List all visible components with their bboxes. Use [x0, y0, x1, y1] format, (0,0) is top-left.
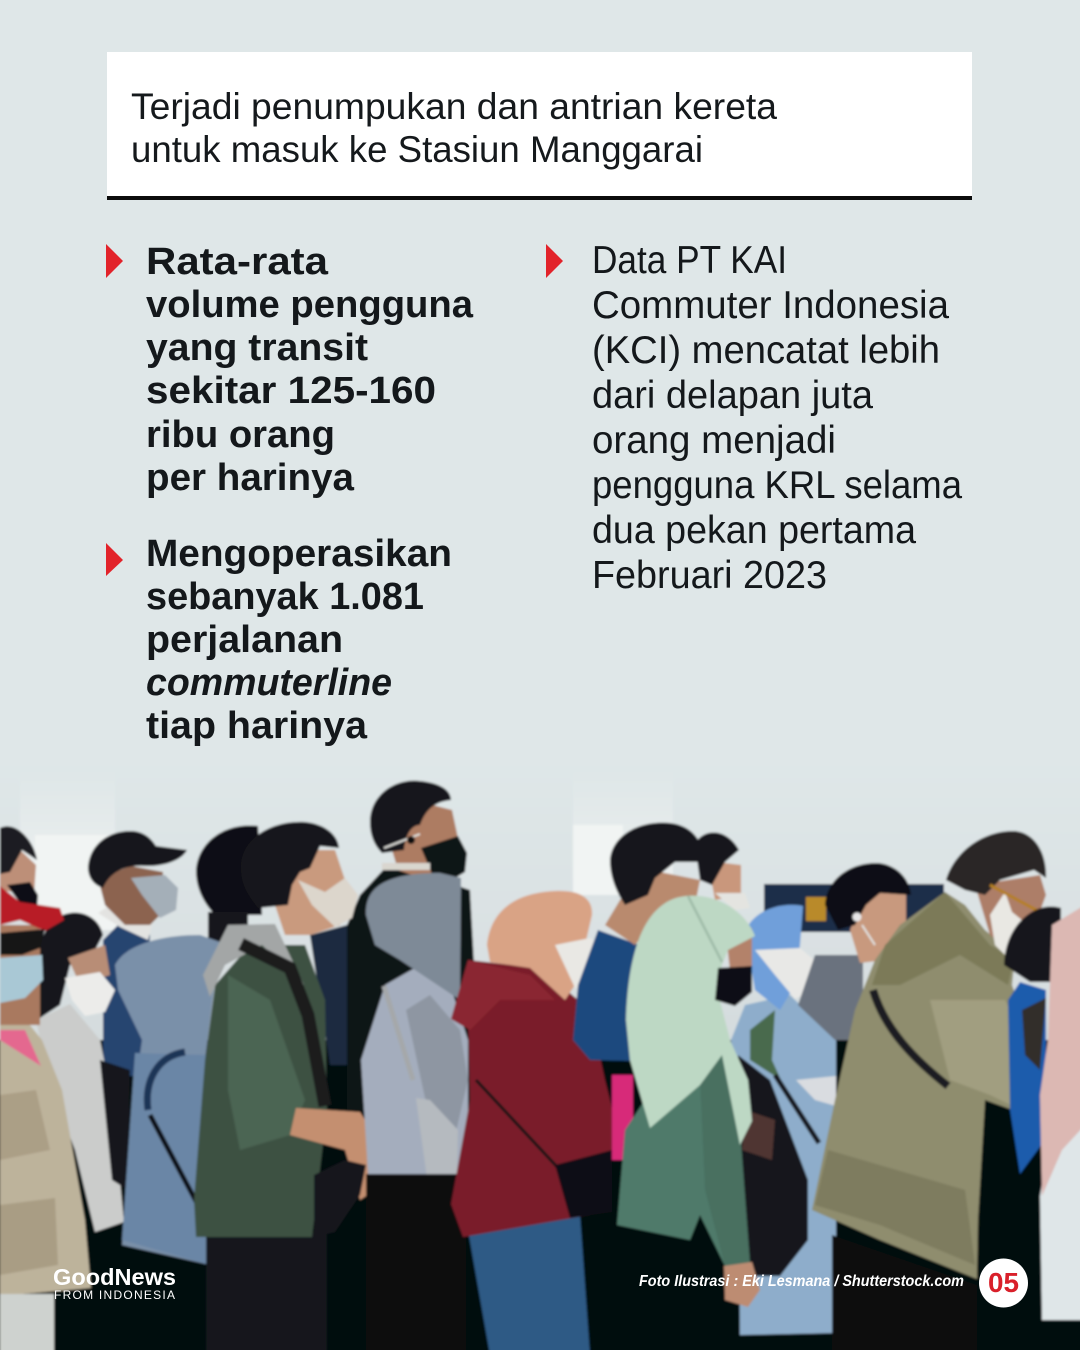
- bullet: average transit users: [106, 241, 474, 499]
- title: [131, 86, 777, 170]
- man with black mask, back row: [347, 781, 476, 1110]
- text block: Februari 2023: [592, 554, 827, 597]
- woman with pink hijab, far right: [1040, 905, 1080, 1320]
- text block: [146, 533, 452, 747]
- icon: red triangle: [546, 244, 563, 278]
- text block: Rata-rata: [146, 241, 329, 283]
- man with red cap and beige vest: [0, 886, 91, 1350]
- person in blue jacket, far right: [1004, 907, 1061, 1174]
- man in olive jacket with white mask: [812, 831, 1046, 1350]
- page number badge: [979, 1258, 1028, 1308]
- text block: dua pekan pertama: [592, 509, 917, 552]
- text block: Data PT KAI: [592, 239, 787, 282]
- man with black cap: [88, 831, 187, 1076]
- text block: [592, 239, 963, 597]
- text block: sekitar 125-160: [146, 370, 436, 412]
- dark lower crowd: [0, 1040, 1080, 1350]
- photo: crowd of commuters queueing: [0, 760, 1080, 1350]
- text block: pengguna KRL selama: [592, 464, 963, 507]
- woman with blue scarf and striped shirt: [731, 905, 836, 1335]
- header panel: [107, 52, 972, 200]
- bullet: KCI data: [546, 239, 963, 597]
- text block: perjalanan: [146, 619, 343, 661]
- text block: Mengoperasikan: [146, 533, 452, 575]
- text block: [146, 241, 474, 499]
- man with white earbud: [798, 863, 911, 1040]
- station wall: [0, 760, 1080, 1120]
- logo: GoodNews from Indonesia: [53, 1264, 176, 1302]
- text block: dari delapan juta: [592, 374, 874, 417]
- title: Terjadi penumpukan dan antrian kereta: [131, 86, 777, 127]
- logo: GoodNews from Indonesia: FROM INDONESIA: [54, 1288, 176, 1302]
- woman with curly hair and white shirt: [20, 913, 130, 1232]
- icon: red triangle: [106, 244, 123, 278]
- person in grey hood and patterned top: [361, 873, 468, 1350]
- text block: volume pengguna: [146, 284, 474, 326]
- woman with green hijab and black mask: [617, 896, 760, 1307]
- bullet: daily commuterline trips: [106, 533, 452, 747]
- dark haired back head: [196, 825, 262, 944]
- page number badge: 05: [988, 1267, 1019, 1298]
- text block: sebanyak 1.081: [146, 576, 424, 618]
- text block: per harinya: [146, 457, 355, 499]
- text block: (KCI) mencatat lebih: [592, 329, 940, 372]
- logo: GoodNews from Indonesia: GoodNews: [53, 1264, 176, 1290]
- young man with blue shirt and second man: [573, 823, 750, 1160]
- dark jacket behind: [310, 925, 347, 1065]
- text block: ribu orang: [146, 414, 335, 456]
- text block: tiap harinya: [146, 705, 368, 747]
- woman with glasses, far left: [0, 826, 38, 910]
- text block: orang menjadi: [592, 419, 836, 462]
- woman with red hoodie and peach hijab: [451, 891, 619, 1350]
- text block: yang transit: [146, 327, 368, 369]
- text block: commuterline: [146, 662, 392, 704]
- photo credit: Foto Ilustrasi : Eki Lesmana / Shutterstock.com: [639, 1273, 964, 1290]
- icon: red triangle: [106, 543, 123, 576]
- text block: Commuter Indonesia: [592, 284, 950, 327]
- man in green jacket: [194, 822, 375, 1350]
- person in blue hood: [115, 935, 220, 1264]
- title: untuk masuk ke Stasiun Manggarai: [131, 129, 703, 170]
